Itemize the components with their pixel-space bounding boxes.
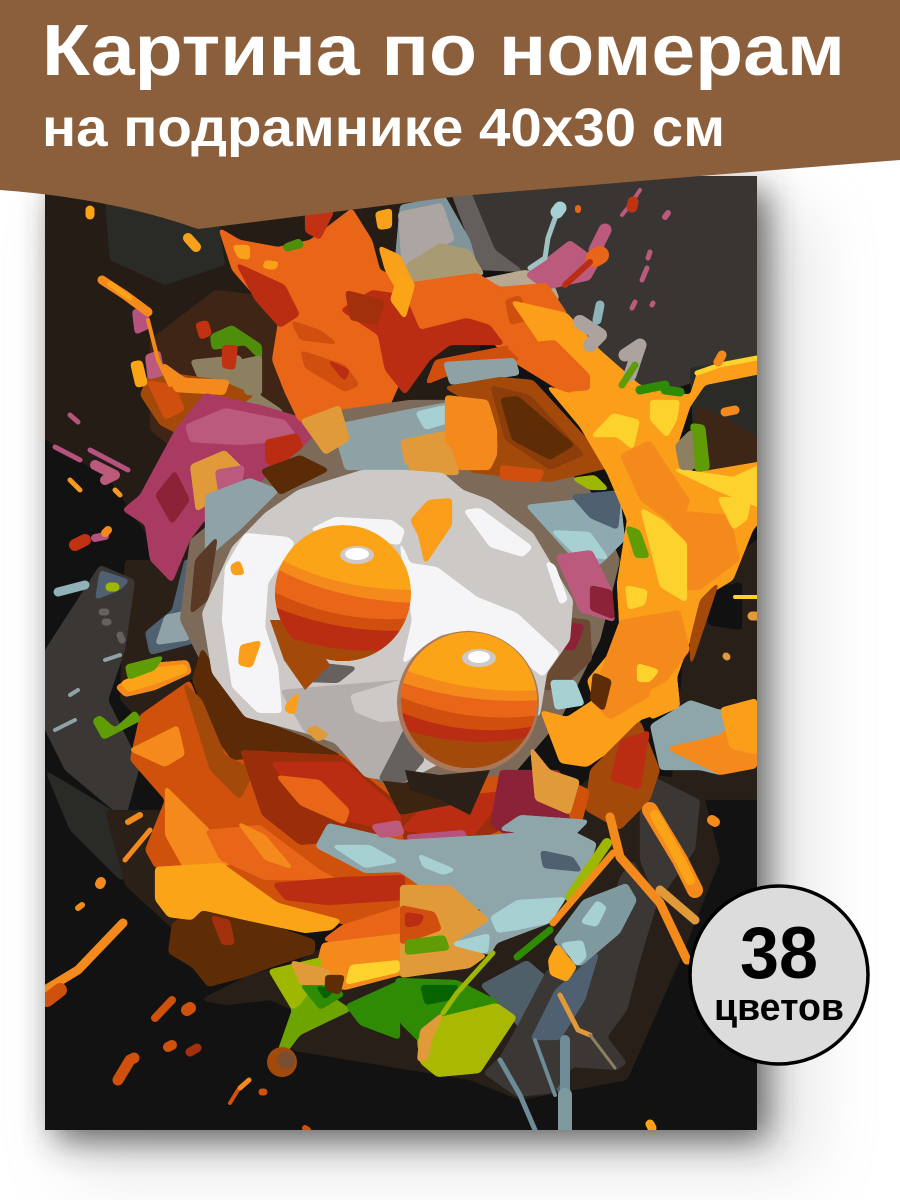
bottom orange body	[92, 647, 590, 1010]
top grey patch	[395, 196, 600, 300]
egg white	[202, 470, 573, 783]
right lower splash	[585, 697, 757, 830]
title: Картина по номерам	[42, 11, 845, 91]
badge: 38 colours: цветов	[714, 987, 844, 1029]
top banner	[0, 0, 900, 229]
badge: 38 colours	[690, 886, 868, 1064]
yolk right	[397, 631, 539, 773]
grey-blue ring around egg	[180, 358, 625, 800]
green bottom splash	[268, 957, 520, 1077]
pink left splash	[124, 394, 312, 581]
dark background zones	[30, 170, 770, 1100]
subtitle: на подрамнике 40х30 см	[42, 98, 725, 158]
yolk left	[275, 525, 411, 661]
brown-orange arc upper right	[405, 377, 613, 490]
canvas shadow	[55, 190, 810, 1170]
upper-left paint cluster	[130, 308, 283, 432]
drips and spatters	[45, 190, 757, 1130]
grey smoke and blue right of green	[483, 860, 657, 1097]
dark hollow under right yolk	[405, 770, 490, 815]
top orange splash	[220, 208, 572, 422]
blue-grey bottom	[315, 815, 597, 1100]
yellow-orange right splash	[505, 300, 770, 767]
brown shadow under left yolk	[270, 620, 330, 690]
badge: 38 colours: 38	[740, 913, 818, 994]
painting: fried eggs with paint splash	[30, 170, 770, 1130]
brown drop under green	[267, 1047, 297, 1077]
